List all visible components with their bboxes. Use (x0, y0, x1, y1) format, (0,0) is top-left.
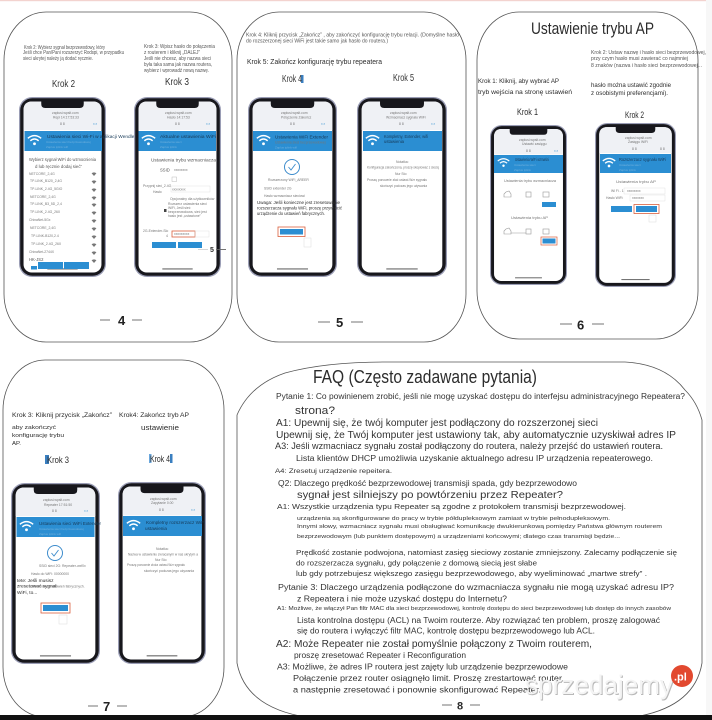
text: question 1: Upewnij się, że Twój komputer jest ustawiony tak, aby automatycznie uzyskiwał adres IP (276, 429, 676, 441)
phone: network list: Wybierz sygnał WiFi do wzmocnienia (29, 157, 97, 162)
phone: amplifier complete: Wzmacniacz sygnału WiFi (386, 116, 426, 120)
heading: Krok 1: Krok 1 (517, 107, 538, 117)
phone: network list: Ustawienia sieci bezprzewodowej (46, 140, 91, 144)
phone: mode selection: Ustawienia sieci (514, 163, 536, 167)
phone: network list: TP-LINK_2.4G_26X (31, 242, 62, 246)
phone: repeater finished: Zaplus tplink wifi (39, 532, 61, 536)
phone: mode selection: Ustawić zasięgu (522, 142, 547, 146)
phone: network list: Repi 14:17:53:33 (53, 116, 79, 120)
text: step 3 instructions: wybierz i wprowadź nową nazwę. (144, 68, 209, 74)
icon: repeater diagram (504, 191, 549, 197)
phone: mode selection: 8 8 (554, 149, 559, 153)
phone: repeater complete: Proszę ponownie złoża ustawi.Wzr sygnału (127, 563, 185, 567)
text: step 2 instructions: sieci ukrytej należy ją dodać ręcznie. (23, 56, 93, 62)
phone: amplifier complete: Notatka: (396, 160, 409, 164)
text: AP step 1 instructions (478, 78, 572, 96)
phone: mode selection: 8 8 (526, 149, 531, 153)
text: question 2: Q2: Dlaczego prędkość bezprzewodowej transmisji spada, gdy bezprzewodowo (278, 479, 578, 488)
text: question 2: bezprzewodowym (lub punktem dostępowym) a urządzeniami końcowymi; dlatego czas transmisji będzie... (297, 534, 620, 540)
watermark: sprzedajemy.pl: sprzedajemy (525, 670, 673, 700)
phone: repeater finished: Ustawienia do ustawień fabrycznych. (29, 584, 85, 588)
phone: repeater finished: zaplusi.wpslt.com (43, 498, 70, 502)
phone: amplifier settings: hasło jest „ustawione” (168, 214, 201, 218)
text: AP step 2 instructions (591, 50, 706, 97)
phone: repeater complete: Nazwa w ustawieniu zwracanym w nas ukrytym a (128, 552, 198, 556)
text: step 3 instructions (144, 44, 215, 74)
text: question 2: do rozszerzacza sygnału, gdy połączenie z domową siecią jest słabe (296, 558, 537, 568)
phone: network list: TP-LINK_2.4G_5GIO (30, 187, 63, 191)
bottom black bar (0, 715, 712, 720)
panel: page 5 (237, 12, 466, 342)
page number: 8: 8 (457, 700, 463, 712)
page number: 4: 4 (118, 313, 126, 328)
phone: repeater complete: 8 8 (159, 508, 164, 512)
phone: network list: Zaplus tplink wifi (46, 145, 68, 149)
phone: amplifier settings: Opcjonalny dla użytkowników (170, 197, 215, 201)
page number: 7 (88, 699, 127, 714)
phone: extender done (248, 97, 343, 277)
phone: amplifier settings: SSID (160, 168, 170, 172)
text: step 2 instructions (23, 45, 124, 62)
text: AP step 2 instructions: Krok 2: Ustaw nazwę i hasło sieci bezprzewodowej, (591, 50, 706, 56)
text: question 3: A2: Może Repeater nie został pomyślnie połączony z Twoim routerem, (276, 639, 592, 650)
text: question 2: A1: Wszystkie urządzenia typu Repeater są zgodne z protokołem transmisji bezprzewodowej. (277, 502, 626, 511)
phone: amplifier settings: 8 8 (206, 122, 211, 126)
text: question 2: urządzenia są skonfigurowane do pracy w trybie półdupleksowym zamiast w trybie pełnodupleksowym. (297, 516, 610, 522)
phone: amplifier settings: 2G-Extender-Slo (143, 229, 168, 233)
phone: repeater finished: Hasło do WiFi: 00000000 (31, 572, 69, 576)
heading: Krok 4: Krok 4 (282, 74, 302, 85)
phone: amplifier settings: xxxxxxxxx (174, 232, 190, 236)
text: question 3: Połączenie przez router osiągnęło limit. Proszę zrestartować router, (293, 674, 564, 683)
phone: amplifier settings: Ustawienia sieci (160, 140, 182, 144)
phone: amplifier settings: bezprzewodowa, sieć jest (168, 210, 207, 214)
phone: amplifier complete: zaplusi.wpslt.com (390, 111, 417, 115)
phone: repeater finished: tete: Jeśli musisz (17, 578, 54, 584)
phone: amplifier settings: 8 8 (175, 122, 180, 126)
text: step 4 instructions: do rozszerzonej sieci WiFi jest takie samo jak hasło do routera.) (246, 38, 388, 44)
phone: extender done: Zaplus tplink wifi (275, 146, 297, 150)
phone: network list: Ustawienia sieci Wi-Fi w aplikacji Wendler (47, 134, 136, 140)
heading: Krok 2: Krok 2 (52, 79, 75, 90)
phone: AP name and password: 8 8 (660, 147, 665, 151)
phone: repeater complete: zaplusi.wpslt.com (150, 497, 177, 501)
phone: AP name and password: Hasło WiFi: (606, 196, 623, 200)
phone: AP name and password (595, 123, 676, 287)
text: AP step 4 instructions: ustawienie (141, 423, 179, 432)
phone: mode selection (490, 125, 567, 285)
phone: repeater complete: ustawienia (145, 526, 167, 532)
heading: Krok 2: Krok 2 (625, 110, 644, 120)
page number: 4 (100, 313, 142, 328)
phone: network list: NETCORE_2,4G (29, 172, 55, 176)
icon: success check (284, 160, 300, 174)
callout: 5: 5 (210, 247, 214, 254)
text: question 3: A1: Możliwe, że włączył Pan filtr MAC dla sieci bezprzewodowej, kontrolę dostępu do sieci bezprzewodowej lub dostęp do innych zasobów (277, 606, 671, 612)
text: step 3 instructions: była taka sama jak nazwa routera, (144, 62, 212, 68)
page number: 5 (318, 315, 363, 330)
phone: amplifier complete: skończyć podczas jego używania (380, 184, 427, 188)
phone: extender done: Ustawienia WiFi Extender (275, 134, 328, 140)
text: question 1 (275, 392, 686, 475)
phone: extender done: 8 8 (321, 122, 326, 126)
text: step 2 instructions: Krok 2: Wybierz sygnał bezprzewodowy, który (24, 45, 105, 51)
text: question 1: Pytanie 1: Co powinienem zrobić, jeśli nie mogę uzyskać dostępu do interfejsu administracyjnego Repeatera? (276, 392, 686, 401)
phone: amplifier complete: Kompletny, Extender, wifi (384, 134, 428, 140)
text: question 2: sygnał jest silniejszy po powtórzeniu przez Repeater? (297, 490, 564, 501)
phone: AP name and password: Zaplus tplink (619, 168, 636, 172)
text: question 3: się do routera i wyłączyć filtr MAC, kontrolę dostępu bezprzewodowego lub ACL. (297, 626, 595, 636)
text: question 3: z Repeatera i nie może uzyskać dostępu do Internetu? (297, 594, 508, 604)
text: AP step 2 instructions: z osobistymi preferencjami). (591, 90, 668, 97)
text: AP step 3 instructions (12, 413, 112, 447)
phone: repeater finished: Ustawienia sieci WiFi Extender (39, 521, 101, 527)
text: question 1: A4: Zresetuj urządzenie repeitera. (275, 468, 392, 475)
text: question 2: Innymi słowy, wzmacniacz sygnału musi obsługiwać komunikację dwukierunkową pomiędzy Państwa głównym routerem (297, 524, 662, 530)
phone: mode selection: Ustawienia WiFi wzmaśni (515, 157, 549, 163)
panel: page 7 (3, 360, 224, 717)
heading: Krok 3: Krok 3 (165, 77, 189, 88)
phone: repeater finished: zresetować sygnał (17, 584, 57, 590)
phone: AP name and password: zaplusi.wpslt.com (625, 136, 652, 140)
text: question 3: Pytanie 3: Dlaczego urządzenia podłączone do wzmacniacza sygnału nie mogą uzyskać adresu IP? (278, 582, 674, 592)
phone: AP name and password: xxxxxxxx (627, 189, 641, 193)
text: AP step 3 instructions: aby zakończyć (12, 425, 56, 431)
phone: amplifier settings: 4 (166, 234, 168, 238)
phone: amplifier settings: Hasło 14:17:53 (167, 116, 190, 120)
phone: extender done: Pólączenie Zakończ (281, 116, 312, 120)
phone: mode selection: zaplusi.wpslt.com (519, 138, 546, 142)
text: AP step 3 instructions: konfigurację trybu (12, 433, 64, 439)
text: step 5 heading: Krok 5: Zakończ konfigurację trybu repeatera (247, 57, 383, 66)
phone: AP name and password: Zasięgu WiFi (628, 140, 648, 144)
page number: 6: 6 (577, 318, 584, 332)
heading: Krok 4: Krok 4 (150, 454, 170, 464)
text: question 3: Lista kontrolna dostępu (ACL) na Twoim routerze. Aby rozwiązać ten problem, proszę zalogować (297, 616, 660, 625)
phone: repeater complete (118, 482, 206, 664)
text: step 2 instructions: Jeśli chce Pan/Pani rozszerzyć Rodspi, w przypadku (23, 50, 124, 56)
text: question 1: A3: Jeśli wzmacniacz sygnału został podłączony do routera, należy przejść do ustawień routera. (275, 441, 663, 451)
phone: extender done: zaplusi.wpslt.com (281, 111, 308, 115)
phone: extender done: 8 8 (290, 122, 295, 126)
phone: amplifier settings: Przypnij sieć_2.4G (143, 184, 172, 188)
phone: amplifier settings: WiFi, Jeśli sieć (168, 206, 191, 210)
phone: network list: TP-LINK_B120_2,4G (30, 179, 62, 183)
phone: amplifier settings: xxxxxxxx (172, 188, 186, 192)
phone: repeater finished: Repeater 17:51:50 (44, 503, 72, 507)
phone: repeater finished: 8 8 (84, 509, 89, 513)
phone: amplifier complete: 8 8 (431, 122, 436, 126)
text: question 3: a następnie zresetować i ponownie skonfigurować Repeater. (293, 686, 541, 694)
phone: AP name and password: Wi Fi - 1 (611, 189, 624, 193)
text: AP step 3 instructions: AP. (12, 441, 21, 447)
phone: repeater complete: Notatka: (156, 547, 169, 551)
phone: network list: d lub ręcznie dodaj sieć” (35, 164, 83, 169)
text: question 2 (277, 479, 677, 578)
phone: network list (19, 97, 136, 277)
phone: AP name and password: 8 8 (632, 147, 637, 151)
phone: extender done: SSID extender 2G (264, 186, 292, 190)
text: step 4 instructions: Krok 4: Kliknij przycisk „Zakończ” , aby zakończyć konfigurację trybu relacji. (Domyślne hasło (246, 32, 459, 38)
phone: amplifier complete: Konfiguracja zakończona, proszę skopiować z sieciq (367, 166, 439, 170)
phone: amplifier settings: Zaplus tplink (160, 145, 177, 149)
page number: 7: 7 (103, 699, 110, 714)
phone: AP name and password: xxxxxxx (632, 196, 644, 200)
page number: 6 (560, 318, 604, 332)
phone: repeater complete: Zapytanie 0.00 (151, 501, 174, 505)
phone: extender done: Rozszerzony WiFi_AREER (268, 178, 309, 182)
phone: network list: 8 8 (93, 122, 98, 126)
phone: network list: NETCORE_2,4G (30, 226, 56, 230)
phone: amplifier settings: zaplusi.wpslt.com (165, 111, 192, 115)
text: question 1: strona? (295, 405, 335, 417)
text: question 3: A3: Możliwe, że adres IP routera jest zajęty lub urządzenie bezprzewodowe (277, 662, 569, 672)
phone: mode selection: Zaplus tplink (514, 168, 531, 172)
text: AP step 2 instructions: przy czym hasło musi zawierać co najmniej (591, 56, 688, 62)
phone: amplifier settings: Rozszerz ustawienia sieci (168, 202, 207, 206)
text: AP step 2 instructions: 8 znaków (nazwa i hasło sieci bezprzewodowej... (591, 63, 702, 69)
panel: page 4 (4, 12, 232, 342)
text: step 3 instructions: z routerem i kliknij „DALEJ” (144, 50, 200, 56)
phone: network list: HK-JS2 (29, 257, 44, 262)
text: question 3: proszę zresetować Repeater i Reconfiguration (294, 651, 466, 660)
phone: network list: ChinaNet-5Gx (29, 218, 51, 222)
text: question 2: Prędkość zostanie podwojona, natomiast zasięg sieciowy zostanie zmniejszony. Zalecamy podłączenie się (296, 548, 677, 557)
text: AP step 4 instructions: Krok4: Zakończ tryb AP (119, 413, 189, 419)
text: question 1: A1: Upewnij się, że twój komputer jest podłączony do rozszerzonej sieci (276, 417, 598, 429)
heading: Krok 3: Krok 3 (47, 455, 69, 465)
phone: extender done: rozszerzacza sygnału WiFi, proszę przywrócić (257, 206, 343, 210)
phone: amplifier complete: ustawienia (384, 139, 404, 145)
text: step 3 instructions: Krok 3: Wpisz hasło do połączenia (144, 44, 215, 50)
phone: network list: zaplusi.wpslt.com (52, 111, 79, 115)
text: AP step 2 instructions: hasło można ustawić zgodnie (591, 82, 672, 89)
page number: 8 (442, 700, 480, 712)
phone: repeater finished: SSID sieci 2G: Repeater-wxf0x (39, 564, 86, 568)
phone: AP name and password: Rozszerzacz sygnału WiFi (619, 157, 666, 163)
phone: extender done: Hasło wzmacniacz sieciowi (264, 194, 305, 198)
heading: Krok 5: Krok 5 (393, 73, 414, 84)
phone: repeater complete: skończyć podczas jego używania (144, 569, 194, 573)
phone: network list: TP-LINK_2.4G_26X (30, 210, 61, 214)
text: question 1: Lista klientów DHCP umożliwia uzyskanie aktualnego adresu IP urządzenia repeaterowego. (296, 454, 653, 463)
phone: amplifier settings: xxxxxxxx (174, 168, 188, 172)
icon: success check (48, 546, 62, 560)
phone: amplifier settings: Ustawienia trybu wzmacniacza (151, 158, 217, 162)
icon: AP diagram (504, 228, 549, 234)
phone: repeater complete: Nur Sto (155, 558, 167, 562)
phone: repeater finished: 8 8 (52, 509, 57, 513)
phone: repeater complete: 8 8 (191, 508, 196, 512)
phone: amplifier complete (357, 97, 447, 277)
phone: repeater finished: Ustawienia sieci bezprzewodowej (39, 527, 84, 531)
text: question 2: lub gdy potrzebujesz większego zasięgu bezprzewodowego, aby wyeliminować „martwe strefy” . (296, 569, 647, 578)
phone: AP name and password: Ustawienia trybu AP (616, 180, 657, 184)
text: step 3 instructions: Jeśli nie chcesz, aby nazwa sieci (144, 56, 211, 62)
phone: extender done: urządzenie do ustawień fabrycznych. (257, 211, 325, 216)
text: AP step 4 instructions (119, 413, 189, 432)
text: question 3 (276, 582, 674, 694)
phone: amplifier settings: Hasło (153, 190, 162, 194)
phone: amplifier complete: Nur Sto (395, 172, 407, 176)
phone: repeater complete: Kompletny rozszerzacz WiFi (146, 520, 205, 526)
phone: network list: NETCORE_2,4G (30, 195, 56, 199)
phone: extender done: Uwaga: Jeśli konieczne jest zresetowanie (257, 200, 340, 205)
phone: amplifier settings (134, 97, 221, 277)
title: FAQ: FAQ (Często zadawane pytania) (313, 367, 537, 387)
title: AP mode: Ustawienie trybu AP (531, 20, 654, 38)
phone: repeater finished (11, 483, 101, 664)
phone: mode selection: Ustawienia trybu wzmacniacza (504, 179, 556, 183)
phone: network list: TP-LINK_B3_5D_2,4 (30, 202, 62, 206)
text: AP step 1 instructions: Krok 1: Kliknij, aby wybrać AP (478, 78, 559, 85)
phone: amplifier complete: Proszę ponownie złać ustawi.Wzr sygnału (367, 178, 427, 182)
phone: amplifier complete: 8 8 (399, 122, 404, 126)
text: step 4 instructions (246, 32, 459, 44)
phone: network list: ChinaNet-2744X (29, 250, 55, 254)
watermark: sprzedajemy.pl: .pl (674, 672, 687, 684)
phone: network list: TP-LINK-B120,2.4 (31, 234, 59, 238)
phone: mode selection: Ustawienia trybu AP (511, 216, 549, 220)
watermark: sprzedajemy.pl: sprzedajemy (526, 671, 674, 701)
page number: 5: 5 (336, 315, 343, 330)
callout: 5 (198, 247, 226, 254)
phone: repeater finished: WiFi, to... (17, 590, 37, 596)
phone: extender done: Ustawienia sieci bezprzewodowej (275, 140, 326, 144)
text: AP step 3 instructions: Krok 3: Kliknij przycisk „Zakończ” (12, 413, 112, 419)
text: AP step 1 instructions: tryb wejścia na stronę ustawień (478, 89, 572, 96)
phone: network list: 8 8 (60, 122, 65, 126)
phone: amplifier settings: Aktualne ustawienia WiFi (160, 134, 216, 140)
phone: AP name and password: Ustawienia sieci (619, 163, 641, 167)
panel: page 6 (477, 12, 706, 339)
panel: page 8 FAQ (237, 362, 702, 716)
